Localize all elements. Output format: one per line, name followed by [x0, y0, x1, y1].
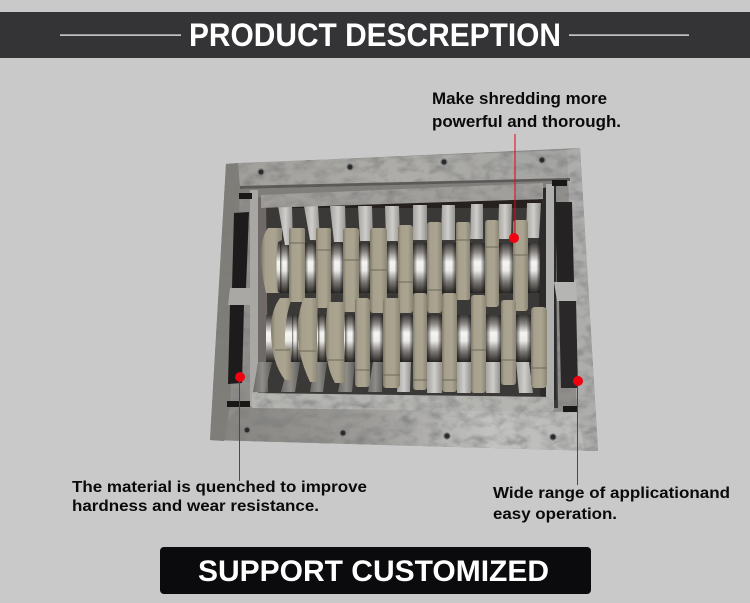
machine frame and plates: [210, 148, 598, 451]
callout: shredding power: Make shredding more: [432, 89, 607, 108]
button: support customized: [160, 547, 591, 594]
bolt holes: [244, 157, 556, 440]
upper and lower clamp bars: [252, 183, 553, 412]
callout: shredding power: powerful and thorough.: [432, 112, 621, 131]
header band: PRODUCT DESCREPTION: [189, 17, 561, 53]
callout: quenched material: [72, 372, 367, 515]
header band: [0, 12, 750, 58]
blade step seams: [275, 240, 547, 380]
upper shaft: [276, 243, 540, 293]
callout: quenched material: The material is quenched to improve: [72, 479, 367, 496]
callout: wide application: Wide range of applicationand: [493, 485, 730, 502]
callout: shredding power: [432, 89, 621, 243]
gaps shading between blades: [280, 243, 540, 362]
lower fixed fingers: [253, 362, 533, 393]
callout: wide application: easy operation.: [493, 506, 617, 523]
button: support customized: SUPPORT CUSTOMIZED: [198, 555, 549, 588]
photo: twin shaft shredder blade assembly: [210, 148, 598, 451]
callout: quenched material: hardness and wear resistance.: [72, 498, 319, 515]
callout: wide application: [493, 376, 730, 523]
upper rotating blades: [261, 220, 528, 313]
lower rotating blades: [271, 293, 547, 393]
lower shaft: [266, 315, 531, 362]
upper fixed fingers: [262, 200, 542, 245]
